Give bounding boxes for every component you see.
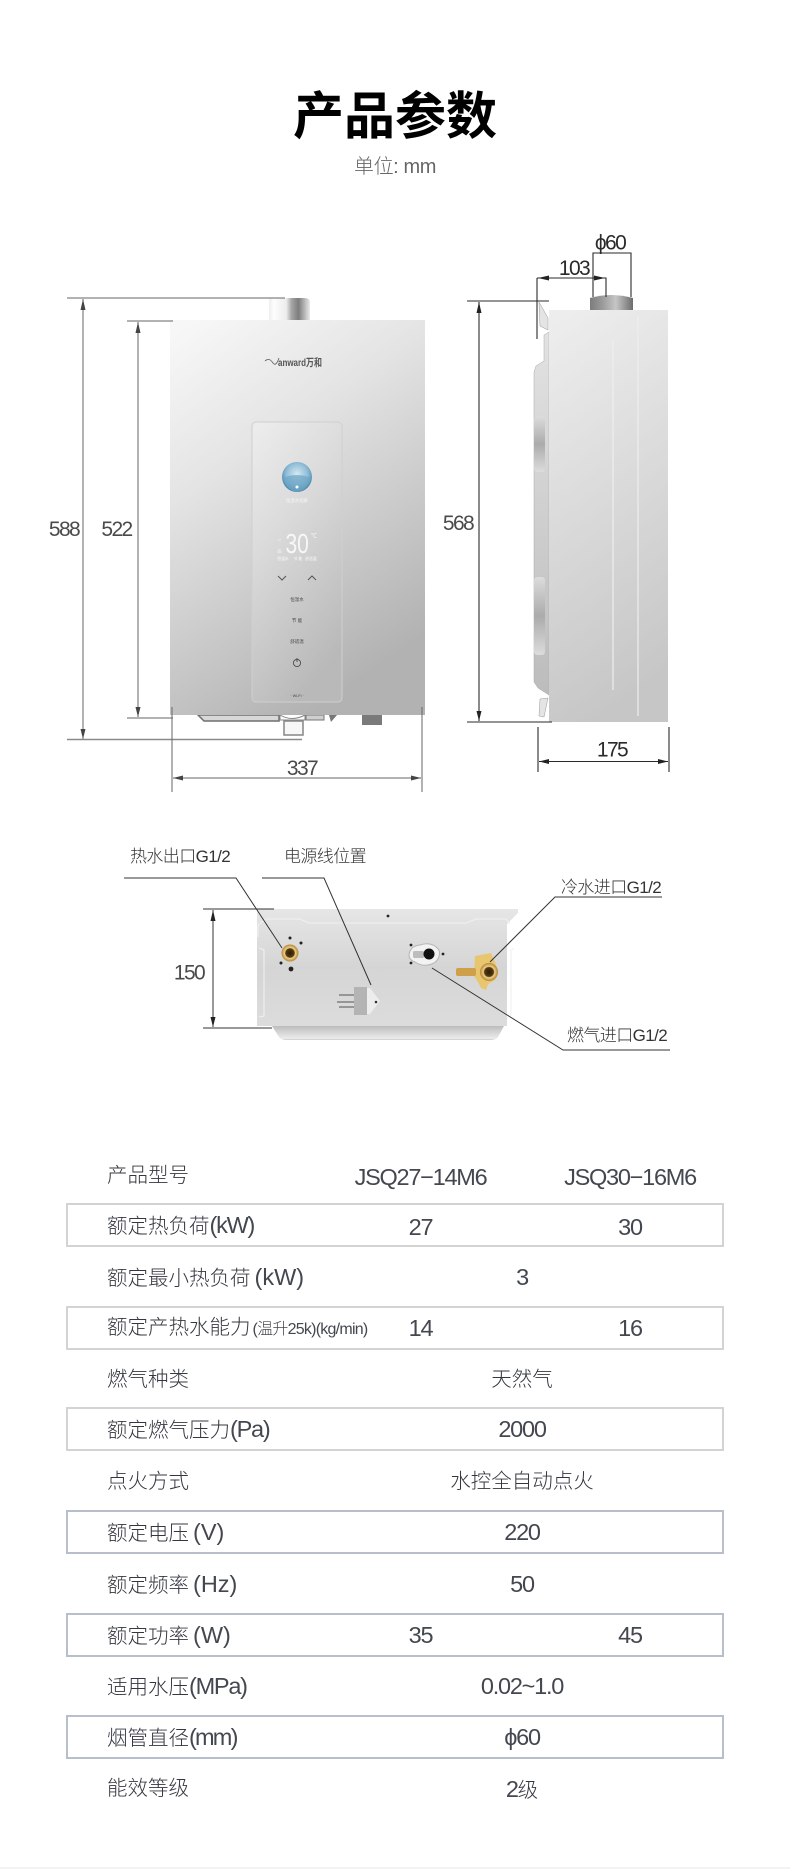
temperature display — [277, 529, 317, 561]
table row: voltage: 220 — [504, 1519, 540, 1545]
label 337: 337 — [287, 757, 318, 780]
gas inlet — [409, 944, 444, 965]
temperature display: ☼ — [277, 537, 282, 543]
temperature display: ♨ — [277, 549, 282, 555]
icon: down and up chevrons — [278, 576, 316, 580]
table row: power: 45 — [618, 1622, 642, 1648]
table row: frequency: 额定频率(Hz) — [107, 1571, 237, 1597]
table row: ignition: 点火方式 — [107, 1470, 189, 1493]
table row: power: 额定功率(W) — [107, 1622, 231, 1648]
table row: ignition: 水控全自动点火 — [450, 1470, 594, 1493]
label 150: 150 — [174, 962, 205, 984]
label 175: 175 — [597, 738, 628, 762]
touch buttons — [290, 596, 304, 645]
label diameter: ϕ60 — [595, 232, 626, 254]
callout: gas inlet: 燃气进口G1/2 — [567, 1026, 667, 1045]
table row: gas type: 燃气种类 — [107, 1368, 189, 1391]
table row: flue diameter — [66, 1715, 724, 1759]
table row: voltage — [66, 1510, 724, 1554]
table row: model — [66, 1153, 724, 1197]
flue pipe — [590, 295, 633, 311]
temperature display: 节 能 — [294, 556, 303, 561]
table row: model: 产品型号 — [107, 1164, 189, 1187]
table row: model: JSQ30−16M6 — [564, 1164, 696, 1190]
hot water outlet — [280, 936, 302, 971]
tray — [272, 1026, 504, 1040]
plate contours — [258, 919, 514, 1017]
icon: power — [293, 658, 301, 667]
wall brackets — [539, 302, 548, 717]
table row: model: JSQ27−14M6 — [355, 1164, 486, 1190]
table row: power — [66, 1613, 724, 1657]
label 568: 568 — [443, 512, 474, 535]
dimension: 103 depth — [537, 257, 606, 339]
callout: gas inlet — [432, 968, 670, 1050]
dimension: 522 height — [101, 321, 173, 718]
specification table — [66, 1164, 724, 1802]
table row: energy grade — [66, 1767, 724, 1811]
table row: rated heat load — [66, 1203, 724, 1247]
table row: water pressure — [66, 1664, 724, 1708]
unit note: 单位: mm — [354, 156, 436, 178]
callout: hot water outlet — [124, 847, 282, 948]
table row: gas type — [66, 1358, 724, 1402]
logo — [265, 356, 322, 369]
dimension: flue diameter — [593, 232, 631, 297]
table row: gas pressure: 2000 — [498, 1416, 546, 1442]
table row: hot water capacity: 额定产热水能力(温升25k)(kg/min) — [107, 1316, 368, 1339]
body — [170, 320, 425, 715]
title: 产品参数 — [293, 88, 497, 145]
table row: gas pressure: 额定燃气压力(Pa) — [107, 1416, 269, 1442]
temperature display: 舒适温 — [305, 556, 317, 561]
table row: gas pressure — [66, 1407, 724, 1451]
table row: hot water capacity: 16 — [618, 1315, 642, 1341]
dimension: 588 height — [49, 298, 302, 740]
table row: power: 35 — [409, 1622, 432, 1648]
touch buttons: 舒适温 — [290, 638, 304, 645]
callout: cold water inlet — [490, 878, 662, 962]
callout: hot water outlet: 热水出口G1/2 — [130, 847, 230, 866]
table row: minimum heat load: 额定最小热负荷(kW) — [107, 1264, 304, 1290]
table row: frequency — [66, 1562, 724, 1606]
table row: hot water capacity — [66, 1306, 724, 1350]
bottom fittings — [198, 715, 382, 735]
recesses — [534, 416, 545, 655]
plate rivet — [387, 915, 389, 917]
diagram: front view of water heater — [170, 298, 425, 735]
table row: minimum heat load: 3 — [516, 1264, 528, 1290]
logo: anward万和 — [278, 356, 322, 369]
table row: energy grade: 能效等级 — [107, 1777, 189, 1800]
label 103: 103 — [559, 257, 590, 280]
bottom strip — [0, 1867, 790, 1869]
globe caption: 恒温水润屏 — [286, 497, 308, 504]
table row: voltage: 额定电压(V) — [107, 1519, 224, 1545]
body — [549, 310, 668, 722]
table row: gas type: 天然气 — [491, 1368, 553, 1391]
dimension: 337 width — [172, 707, 422, 792]
grooves — [613, 316, 638, 716]
callout: power cord — [262, 847, 371, 985]
dimension: 175 width — [538, 727, 669, 772]
control panel — [252, 422, 342, 702]
label 588: 588 — [49, 518, 80, 541]
cold water inlet — [456, 953, 498, 990]
table row: minimum heat load — [66, 1255, 724, 1299]
callout: power cord: 电源线位置 — [284, 847, 366, 866]
table row: energy grade: 2级 — [506, 1776, 538, 1802]
touch buttons: 节 能 — [292, 617, 303, 624]
table row: rated heat load: 27 — [409, 1214, 432, 1240]
dimension: 150 depth — [174, 909, 274, 1028]
back plate — [534, 332, 549, 695]
table row: rated heat load: 额定热负荷(kW) — [107, 1212, 254, 1238]
table row: ignition — [66, 1460, 724, 1504]
table row: water pressure: 0.02~1.0 — [481, 1673, 563, 1699]
callout: cold water inlet: 冷水进口G1/2 — [561, 878, 661, 897]
touch buttons: 恒温水 — [290, 596, 304, 603]
icon: water globe — [282, 462, 312, 492]
temperature display: ℃ — [311, 533, 317, 540]
bottom plate — [257, 909, 518, 1026]
temperature display: 30 — [286, 529, 309, 560]
table row: hot water capacity: 14 — [409, 1315, 432, 1341]
table row: water pressure: 适用水压(MPa) — [107, 1673, 247, 1699]
temperature display: 恒温水 — [277, 556, 289, 561]
table row: frequency: 50 — [510, 1571, 534, 1597]
diagram: bottom view of water heater — [257, 909, 518, 1040]
chimney — [269, 298, 310, 321]
label 522: 522 — [101, 518, 133, 541]
panel mark: · Wi-Fi · — [290, 694, 304, 698]
table row: flue diameter: ϕ60 — [504, 1724, 540, 1750]
table row: rated heat load: 30 — [618, 1214, 642, 1240]
table row: flue diameter: 烟管直径(mm) — [107, 1724, 237, 1750]
power plug — [337, 987, 380, 1015]
diagram: side view of water heater — [534, 295, 668, 722]
dimension: 568 height — [443, 301, 552, 722]
